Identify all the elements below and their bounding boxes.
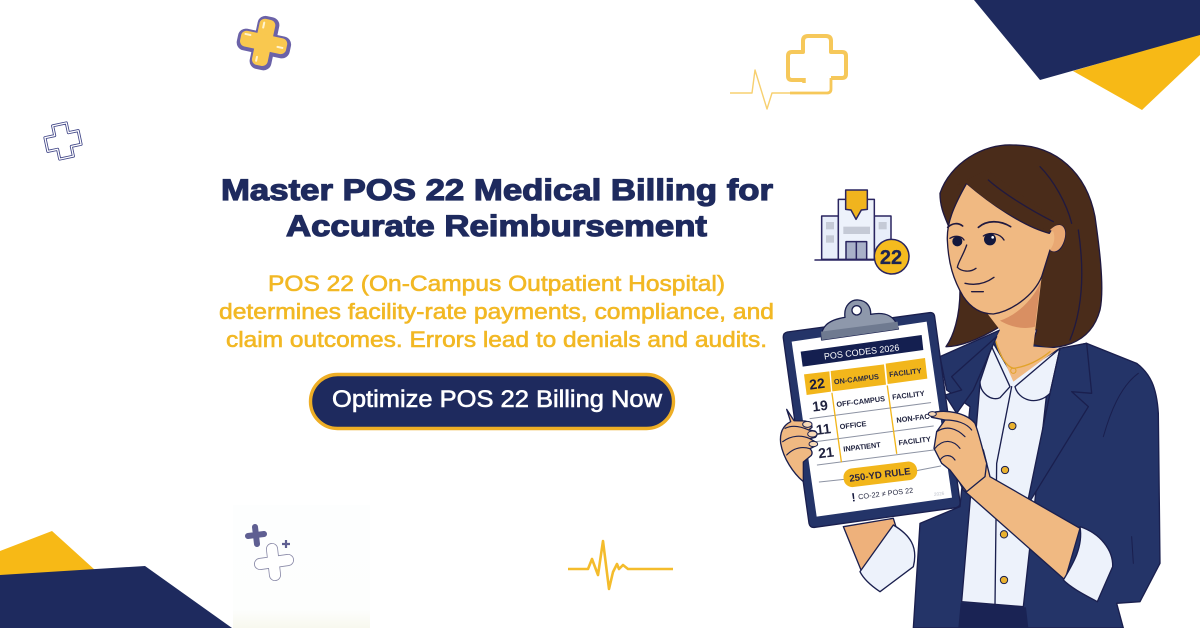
call to action button: Optimize POS 22 Billing Now (332, 386, 663, 413)
table rows: FACILITY (892, 389, 925, 402)
left hand (780, 409, 818, 482)
call to action button (310, 374, 674, 428)
icon: hospital with 22 badge (815, 190, 909, 274)
icon: heartbeat line (568, 541, 673, 589)
description text: POS 22 (On-Campus Outpatient Hospital) (268, 271, 725, 296)
icon: small crosses (248, 527, 290, 575)
icon: gold cross (232, 11, 296, 75)
description text (219, 271, 774, 352)
title: Accurate Reimbursement (286, 210, 707, 243)
face (947, 183, 1065, 314)
right forearm and cuff (950, 450, 1113, 602)
jacket (913, 330, 1160, 628)
faint background patch (233, 505, 370, 628)
table rows: INPATIENT (843, 440, 882, 454)
table rows: OFF-CAMPUS (836, 394, 886, 409)
clipboard clip (821, 300, 898, 340)
neck (983, 277, 1058, 382)
row 22 highlighted: 22 (808, 375, 826, 393)
illustration: woman holding clipboard (780, 145, 1160, 628)
description text: claim outcomes. Errors lead to denials and audits. (226, 327, 767, 352)
warning note: CO-22 ≠ POS 22 (858, 486, 914, 501)
table rows: 21 (817, 443, 835, 461)
top right corner shapes (974, 0, 1200, 110)
table header: POS CODES 2026 (823, 342, 900, 362)
table rows: FACILITY (898, 434, 932, 447)
table header (801, 335, 923, 367)
warning note (851, 486, 945, 505)
necklace (996, 342, 1050, 368)
icon: outlined cross left (43, 121, 83, 161)
table rows: 11 (815, 420, 832, 438)
title (221, 174, 773, 243)
row 22 highlighted: ON-CAMPUS (833, 372, 879, 386)
250-yd rule pill (842, 461, 918, 488)
icon: hospital with 22 badge: 22 (880, 247, 902, 269)
description text: determines facility-rate payments, compliance, and (219, 299, 774, 324)
collar and lapels (945, 337, 1092, 605)
table rows: OFFICE (839, 419, 867, 431)
shirt buttons (1000, 422, 1016, 584)
warning note: ! (851, 490, 856, 505)
shirt (962, 343, 1060, 607)
title: Master POS 22 Medical Billing for (221, 174, 773, 207)
250-yd rule pill: 250-YD RULE (849, 466, 912, 485)
hair (940, 145, 1102, 348)
table rows: 19 (811, 397, 829, 415)
clipboard (783, 300, 960, 527)
icon: gold cross outline with heartbeat (730, 36, 846, 109)
right hand (928, 411, 987, 492)
left forearm and cuff (843, 518, 915, 592)
row 22 highlighted (804, 358, 927, 395)
warning note: 2026 (934, 491, 945, 497)
row 22 highlighted: FACILITY (889, 366, 922, 379)
bottom left corner shapes (0, 531, 232, 628)
table rows: NON-FAC (896, 412, 931, 425)
table rows (811, 389, 932, 461)
